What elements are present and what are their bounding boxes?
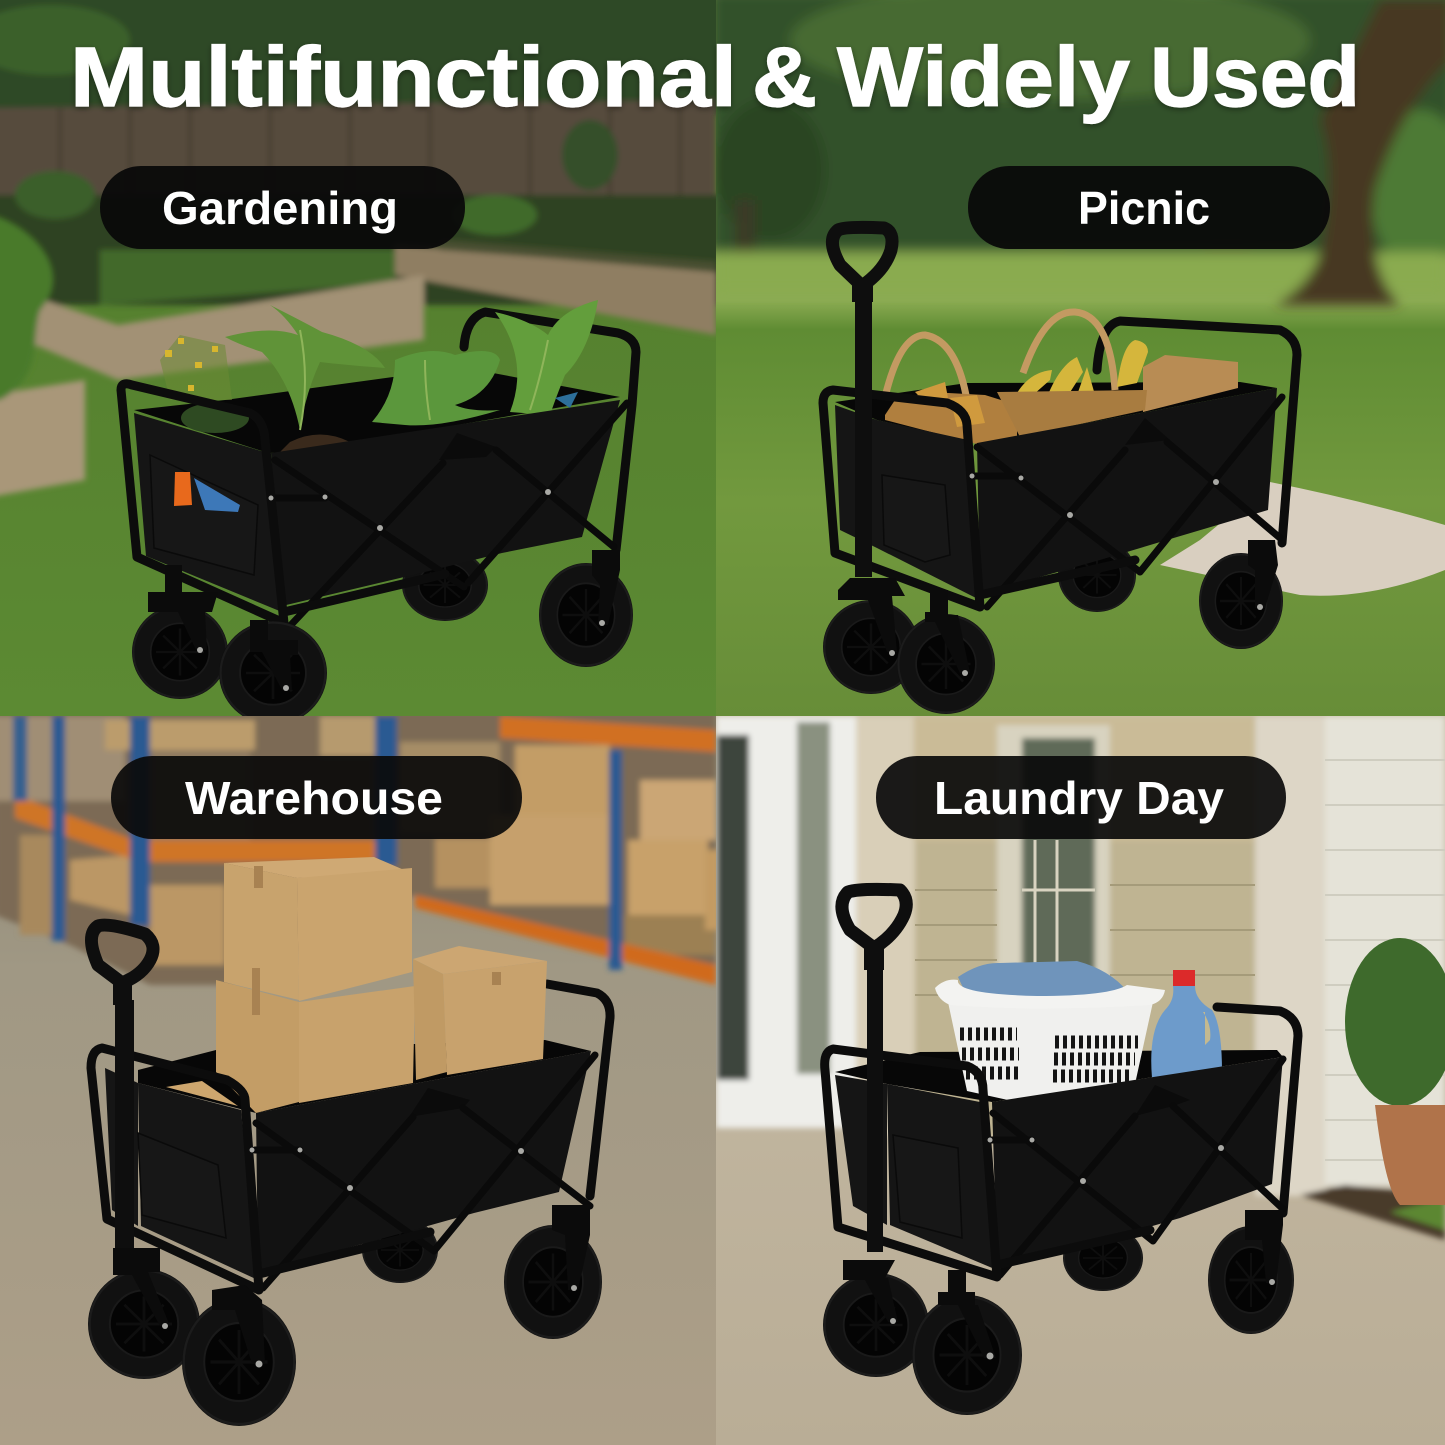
label: laundry day (876, 756, 1286, 839)
side fabric (105, 1068, 258, 1280)
side fabric (835, 405, 980, 600)
picnic blanket (1160, 482, 1445, 596)
front strap (409, 1088, 470, 1117)
icon: detergent bottle (1151, 970, 1222, 1078)
panel: gardening (0, 0, 730, 725)
wagon interior (138, 1040, 591, 1113)
back wheel (1063, 1225, 1143, 1291)
back wheel (362, 1226, 438, 1283)
right handle rail (1217, 1007, 1298, 1213)
cross braces (975, 397, 1282, 607)
label: warehouse (111, 756, 522, 839)
icon: laundry basket with towels (935, 961, 1165, 1102)
cross braces (990, 1059, 1283, 1275)
right handle rail (1097, 321, 1297, 543)
side pocket (893, 1135, 962, 1238)
title: Used (1150, 30, 1360, 124)
label: gardening (100, 166, 465, 249)
label: gardening: Gardening (162, 182, 398, 234)
right handle rail (464, 312, 636, 550)
front strap (1125, 418, 1170, 445)
left frame rail (91, 1048, 430, 1290)
panel: warehouse (0, 710, 720, 1445)
front fabric (256, 1051, 591, 1272)
pocket tools (174, 472, 240, 512)
frame bolts (970, 474, 1219, 518)
cross braces (271, 403, 627, 627)
potted plant (1345, 938, 1445, 1205)
frame bolts (268, 489, 551, 531)
front fabric (977, 388, 1277, 594)
handle (842, 889, 906, 1252)
back wheel (1058, 552, 1136, 612)
left frame rail (121, 384, 445, 623)
side fabric (835, 1075, 997, 1270)
side pocket (138, 1133, 226, 1238)
front fabric (992, 1057, 1283, 1265)
side fabric (134, 413, 282, 612)
title: Multifunctional (70, 30, 737, 124)
wagon interior (835, 1050, 1283, 1102)
wheels and forks (132, 550, 633, 725)
title: & (752, 30, 817, 124)
gardening background (0, 0, 730, 716)
wagon: laundry day (823, 889, 1298, 1415)
back wheel (402, 560, 488, 621)
frame bolts (250, 1148, 524, 1191)
right handle rail (547, 984, 610, 1196)
wagon: picnic (823, 227, 1297, 714)
icon: cardboard boxes (166, 857, 547, 1113)
wheels and forks (88, 1205, 602, 1426)
wagon: gardening (121, 300, 636, 725)
front fabric (271, 400, 620, 606)
wagon interior (134, 373, 620, 453)
label: laundry day: Laundry Day (934, 772, 1224, 824)
label: picnic: Picnic (1078, 182, 1210, 234)
left frame rail (825, 1049, 1150, 1277)
warehouse background (0, 710, 720, 1445)
title: Widely (837, 30, 1130, 124)
side pocket (882, 475, 950, 562)
wheels and forks (823, 1210, 1294, 1415)
laundry background (716, 716, 1445, 1445)
icon: plants (160, 300, 598, 452)
title (70, 30, 1360, 124)
cross braces (255, 1055, 595, 1288)
picnic background (710, 0, 1445, 716)
front strap (439, 433, 496, 460)
side pocket (150, 455, 258, 575)
panel: laundry day (716, 716, 1445, 1445)
icon: picnic baskets and box (885, 312, 1238, 444)
frame bolts (988, 1138, 1224, 1184)
handle (832, 227, 892, 577)
handle (92, 925, 153, 1249)
label: warehouse: Warehouse (185, 772, 443, 824)
left frame rail (823, 390, 1135, 607)
panel: picnic (710, 0, 1445, 716)
wheels and forks (823, 540, 1283, 714)
wagon: warehouse (88, 857, 610, 1426)
front strap (1135, 1085, 1190, 1116)
label: picnic (968, 166, 1330, 249)
wagon interior (835, 382, 1277, 436)
